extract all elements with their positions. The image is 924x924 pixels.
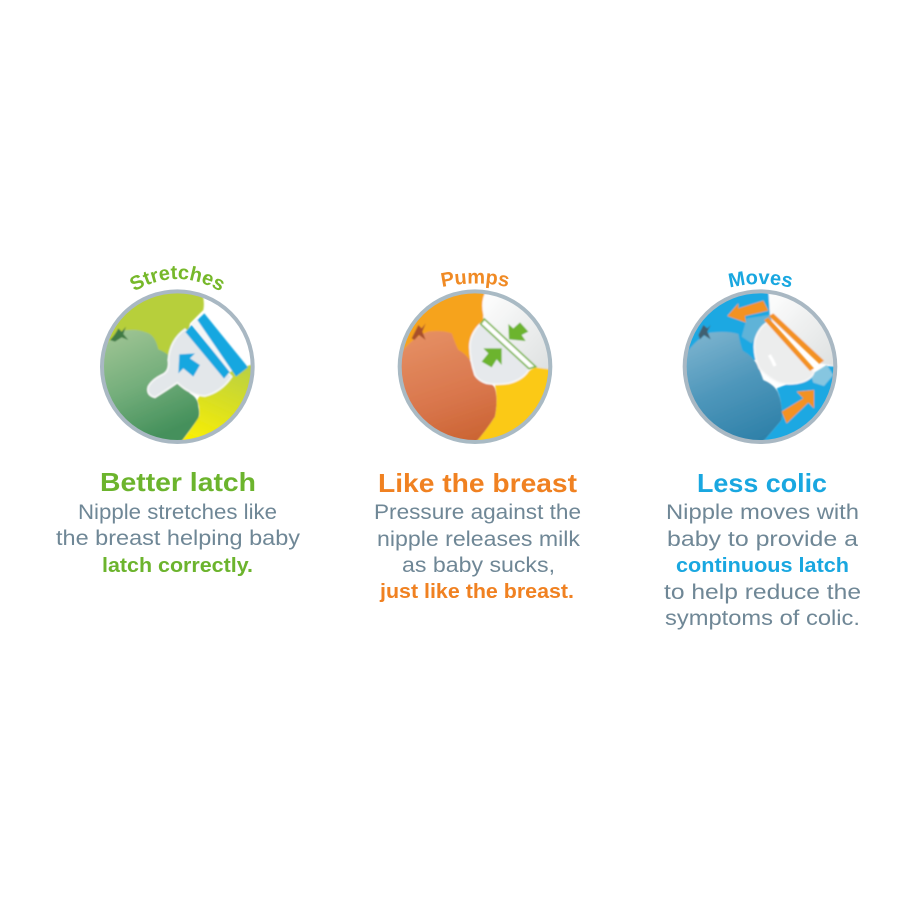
curved label: Moves: Moves	[728, 271, 792, 288]
text block: stretches description	[56, 501, 301, 577]
curved label: Stretches: Stretches	[130, 266, 224, 290]
icon: baby latching on stretching nipple	[93, 291, 257, 450]
text block: moves description: symptoms of colic.	[665, 607, 860, 630]
curved label: Pumps: Pumps	[441, 272, 508, 288]
text block: moves description: to help reduce the	[664, 581, 861, 604]
text block: pumps description: as baby sucks,	[402, 554, 555, 577]
heading: Less colic: Less colic	[697, 468, 827, 498]
text block: moves description: Nipple moves with	[666, 501, 859, 524]
panel: moves	[664, 271, 861, 630]
text block: pumps description	[374, 501, 581, 603]
text block: stretches description: latch correctly.	[102, 555, 253, 577]
text block: pumps description: nipple releases milk	[377, 528, 581, 551]
heading: Better latch: Better latch	[100, 467, 256, 497]
panel: stretches	[56, 266, 301, 577]
text block: stretches description: Nipple stretches like	[78, 501, 277, 524]
text block: stretches description: the breast helping baby	[56, 527, 301, 550]
text block: moves description: continuous latch	[676, 555, 849, 577]
icon: nipple moving with baby	[677, 290, 840, 450]
text block: moves description	[664, 501, 861, 630]
text block: moves description: baby to provide a	[667, 528, 858, 551]
panel: pumps	[374, 272, 581, 603]
text block: pumps description: Pressure against the	[374, 501, 581, 524]
text block: pumps description: just like the breast.	[379, 581, 574, 603]
icon: baby compressing nipple	[392, 290, 555, 450]
heading: Like the breast: Like the breast	[378, 468, 577, 498]
